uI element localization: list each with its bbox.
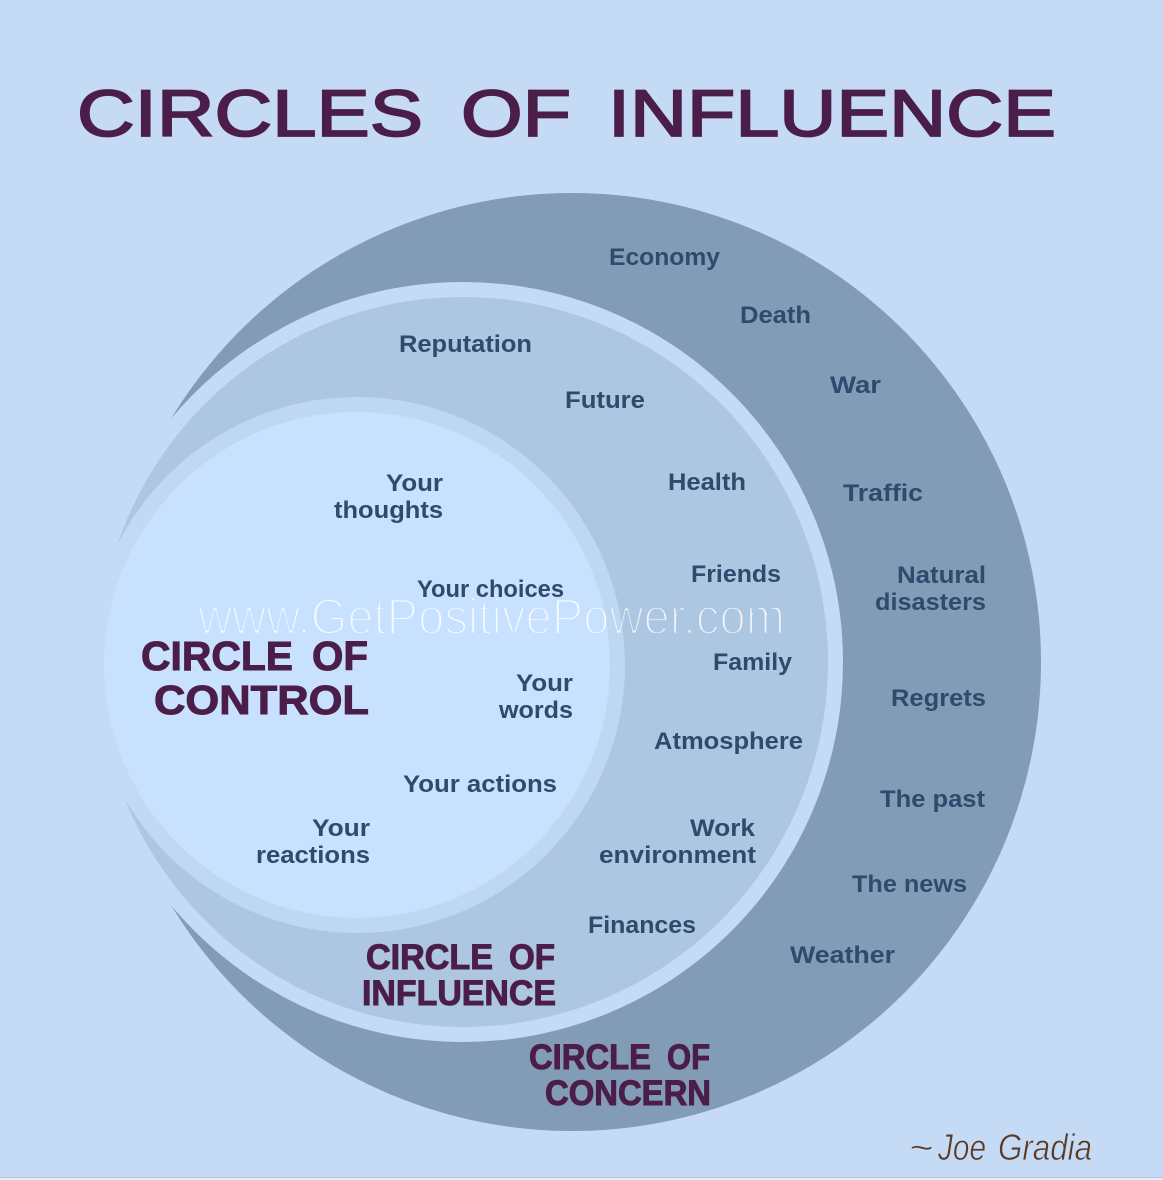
label: Reputation: Reputation bbox=[399, 331, 532, 358]
signature: Joe Gradia: Joe bbox=[937, 1127, 986, 1168]
label: Natural disasters: disasters bbox=[875, 589, 986, 616]
label: Future: Future bbox=[565, 387, 645, 414]
label: War: War bbox=[830, 372, 881, 399]
heading: circle of concern: CONCERN bbox=[545, 1074, 711, 1113]
label: Your words: Your bbox=[516, 670, 573, 697]
label: Work environment bbox=[599, 815, 756, 869]
label: Natural disasters: Natural bbox=[897, 562, 986, 589]
label: Death: Death bbox=[740, 302, 811, 329]
title: CIRCLES bbox=[77, 76, 423, 150]
heading: circle of influence: OF bbox=[509, 938, 555, 977]
label: Your reactions: reactions bbox=[256, 842, 370, 869]
label: The news: The news bbox=[852, 871, 967, 898]
heading: circle of control: OF bbox=[312, 633, 368, 679]
label: Work environment: Work bbox=[690, 815, 756, 842]
label: Your choices: Your choices bbox=[417, 576, 564, 603]
heading: circle of concern: CIRCLE bbox=[529, 1038, 651, 1077]
title: OF bbox=[461, 76, 571, 150]
panel: circle of concern bbox=[103, 193, 1041, 1131]
label: Family: Family bbox=[713, 649, 793, 676]
label: Traffic: Traffic bbox=[843, 480, 923, 507]
heading: circle of influence bbox=[362, 938, 556, 1013]
heading: circle of concern: OF bbox=[667, 1038, 710, 1077]
watermark: www.GetPositivePower.com bbox=[197, 588, 785, 645]
panel: circle of influence bbox=[83, 282, 843, 1042]
label: Your thoughts: thoughts bbox=[334, 497, 443, 524]
label: Your thoughts bbox=[334, 470, 443, 524]
heading: circle of control: CONTROL bbox=[154, 677, 369, 723]
label: Your actions: Your actions bbox=[403, 771, 557, 798]
signature: Joe Gradia: ~ bbox=[909, 1127, 933, 1168]
label: Finances: Finances bbox=[588, 912, 696, 939]
label: Friends: Friends bbox=[691, 561, 781, 588]
heading: circle of control bbox=[141, 633, 369, 723]
signature: Joe Gradia bbox=[909, 1127, 1092, 1168]
label: Atmosphere: Atmosphere bbox=[654, 728, 803, 755]
label: Regrets: Regrets bbox=[891, 685, 986, 712]
label: Your thoughts: Your bbox=[386, 470, 443, 497]
label: Work environment: environment bbox=[599, 842, 756, 869]
label: Economy: Economy bbox=[609, 244, 721, 271]
label: Weather: Weather bbox=[790, 942, 895, 969]
heading: circle of influence: CIRCLE bbox=[366, 938, 493, 977]
label: Health: Health bbox=[668, 469, 746, 496]
label: The past: The past bbox=[880, 786, 985, 813]
label: Your reactions: Your bbox=[312, 815, 370, 842]
heading: circle of influence: INFLUENCE bbox=[362, 974, 556, 1013]
label: Your words: words bbox=[498, 697, 573, 724]
title: INFLUENCE bbox=[608, 76, 1056, 150]
label: Natural disasters bbox=[875, 562, 986, 616]
title bbox=[77, 76, 1056, 150]
heading: circle of control: CIRCLE bbox=[141, 633, 293, 679]
heading: circle of concern bbox=[529, 1038, 711, 1113]
signature: Joe Gradia: Gradia bbox=[998, 1127, 1092, 1168]
label: Your reactions bbox=[256, 815, 370, 869]
label: Your words bbox=[498, 670, 573, 724]
panel: circle of control bbox=[89, 397, 625, 933]
